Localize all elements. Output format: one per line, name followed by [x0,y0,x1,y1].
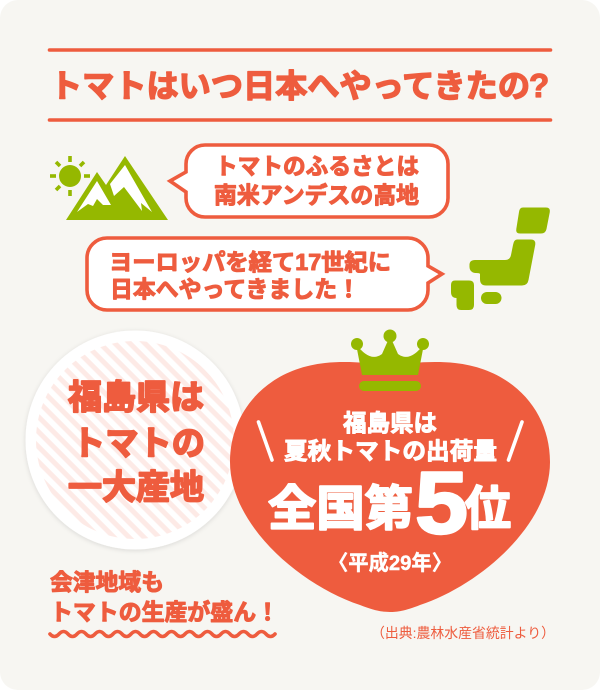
source note: （出典:農林水産省統計より） [371,625,555,641]
stat: shipment ranking: 福島県は [343,410,437,436]
note: Aizu region [50,569,279,636]
stat: shipment ranking: 全国第 [268,483,413,536]
stat: shipment ranking: 位 [465,482,511,535]
speech bubble: origin: 南米アンデスの高地 [214,182,419,208]
circle: Fukushima tomato region: トマトの [72,425,205,463]
circle: Fukushima tomato region: 一大産地 [68,469,204,507]
title block: ? [529,67,549,104]
stat: shipment ranking: 〈平成29年〉 [328,551,452,575]
stat: shipment ranking [258,410,522,575]
speech bubble: route to Japan [87,238,442,310]
speech bubble: origin: トマトのふるさとは [215,153,419,179]
note: Aizu region: 会津地域も [50,569,164,595]
circle: Fukushima tomato region [26,330,244,550]
stat: shipment ranking: 5 [415,453,468,552]
icon: sun and mountains [50,156,168,220]
icon: map of Japan [451,208,550,310]
title block [50,50,550,120]
title block: トマトはいつ日本へやってきたの [50,68,530,104]
icon: crown [351,330,429,391]
speech bubble: route to Japan: ヨーロッパを経て17世紀に [109,249,391,275]
note: Aizu region: トマトの生産が盛ん！ [50,599,279,625]
speech bubble: route to Japan: 日本へやってきました！ [110,276,360,302]
circle: Fukushima tomato region: 福島県は [68,379,204,417]
heart-shaped tomato [230,362,550,612]
stat: shipment ranking: 夏秋トマトの出荷量 [284,438,497,464]
speech bubble: origin [170,145,448,217]
